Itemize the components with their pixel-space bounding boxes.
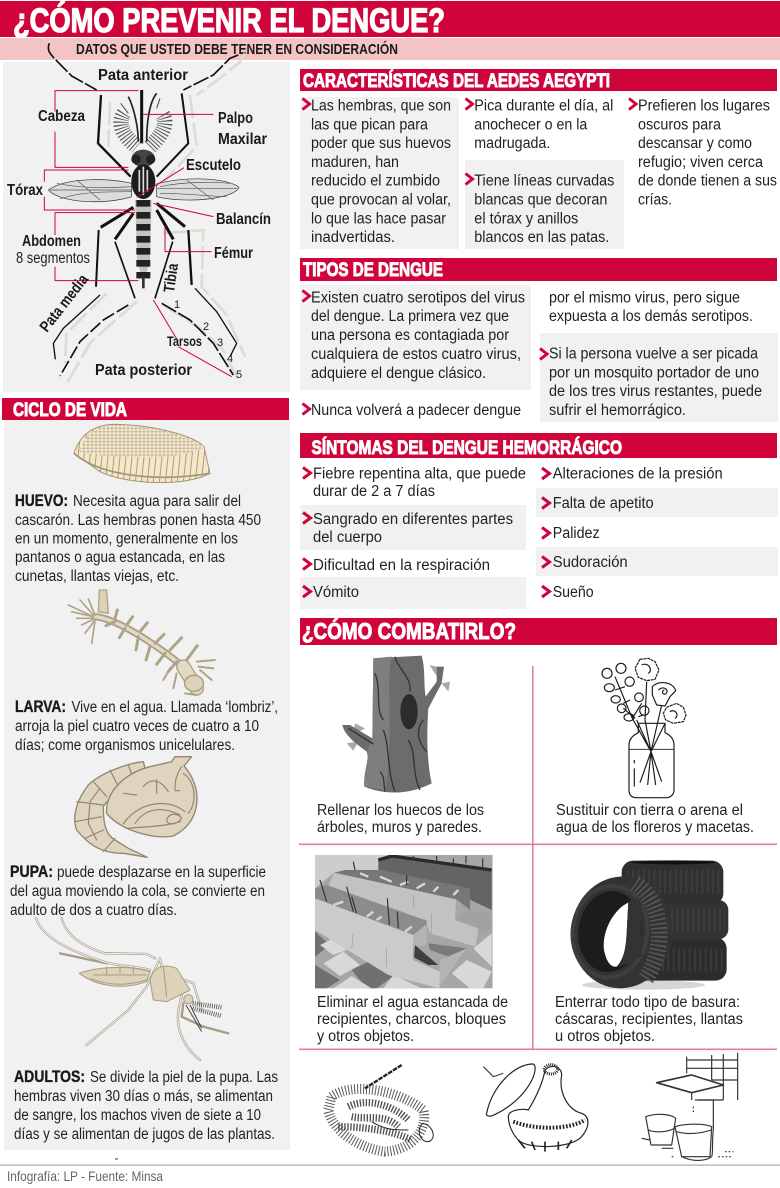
panel: mosquito anatomy bbox=[3, 43, 290, 392]
title banner bbox=[0, 1, 780, 40]
sketch: covered container bbox=[483, 1064, 588, 1152]
bullet: serotipos: una persona es contagiada por bbox=[311, 327, 509, 344]
text: pupa bbox=[10, 863, 266, 919]
bullet: hemorrágico bbox=[540, 333, 778, 422]
bullet: hemorrágico: de los tres virus restantes, puede bbox=[549, 383, 762, 400]
text: huevo: en un momento, generalmente en los bbox=[15, 530, 238, 548]
symptoms left column: durar de 2 a 7 días bbox=[313, 483, 435, 500]
wings bbox=[48, 179, 239, 202]
bullet: hembras: poder que sus huevos bbox=[311, 135, 451, 152]
heading: características: CARACTERÍSTICAS DEL AEDES AEGYPTI bbox=[303, 69, 610, 92]
bullet: nunca volverá: por el mismo virus, pero sigue bbox=[549, 289, 740, 306]
caption: eliminar: y otros objetos. bbox=[317, 1028, 414, 1045]
footer: Infografía: LP - Fuente: Minsa bbox=[7, 1168, 163, 1184]
bullet: lugares: crías. bbox=[638, 192, 672, 208]
text: adultos bbox=[14, 1068, 278, 1143]
text: adultos: días y se alimentan de jugos de las plantas. bbox=[14, 1126, 275, 1143]
text: larva: Vive en el agua. Llamada ‘lombriz’, bbox=[72, 699, 278, 716]
anatomy labels: Maxilar bbox=[218, 131, 267, 148]
bullet: serotipos: Existen cuatro serotipos del virus bbox=[311, 289, 525, 306]
text: huevo bbox=[15, 492, 261, 585]
bullet: nunca volverá: Nunca volverá a padecer dengue bbox=[311, 402, 521, 419]
anatomy labels: Pata posterior bbox=[95, 362, 192, 379]
bullet: líneas bbox=[465, 160, 624, 249]
proboscis and head bbox=[131, 90, 155, 167]
anatomy labels: 3 bbox=[217, 337, 223, 349]
bullet: pica bbox=[466, 98, 613, 152]
illustration: pupa bbox=[75, 757, 197, 857]
bullet: hemorrágico: por un mosquito portador de uno bbox=[549, 364, 759, 382]
caption: rellenar: árboles, muros y paredes. bbox=[317, 819, 482, 836]
bullet: lugares: refugio; viven cerca bbox=[638, 154, 763, 171]
text: larva: LARVA: bbox=[15, 698, 66, 716]
anatomy labels: Fémur bbox=[214, 245, 253, 262]
symptoms left column: Dificultad en la respiración bbox=[313, 557, 490, 574]
caption: rellenar bbox=[317, 802, 484, 836]
illustration: egg bbox=[74, 424, 210, 483]
symptoms left column: Vómito bbox=[313, 584, 359, 601]
subtitle band: DATOS QUE USTED DEBE TENER EN CONSIDERACIÓN bbox=[76, 40, 398, 58]
mosquito diagram bbox=[44, 43, 245, 383]
caption: sustituir bbox=[556, 802, 754, 836]
bullet: pica: madrugada. bbox=[474, 135, 550, 152]
caption: eliminar: recipientes, charcos, bloques bbox=[317, 1011, 506, 1028]
caption: sustituir: agua de los floreros y macetas. bbox=[556, 819, 754, 836]
text: pupa: PUPA: bbox=[10, 863, 53, 881]
thorax bbox=[131, 164, 155, 199]
symptoms right column: Falta de apetito bbox=[553, 495, 654, 512]
anatomy labels: 2 bbox=[203, 321, 209, 333]
bullet: serotipos: del dengue. La primera vez que bbox=[311, 308, 509, 325]
text: pupa: adulto de dos a cuatro días. bbox=[10, 902, 177, 919]
text: pupa: puede desplazarse en la superficie bbox=[57, 864, 266, 881]
red callout lines bbox=[44, 91, 232, 377]
panel: síntomas bbox=[300, 433, 778, 609]
symptoms left column: Sangrado en diferentes partes bbox=[313, 511, 513, 528]
bullet: serotipos bbox=[300, 285, 531, 390]
caption: rellenar: Rellenar los huecos de los bbox=[317, 802, 484, 819]
bullet: serotipos: cualquiera de estos cuatro virus, bbox=[311, 346, 521, 363]
anatomy labels: 5 bbox=[236, 369, 242, 381]
antennae bbox=[121, 93, 165, 147]
symptoms right column: Palidez bbox=[553, 525, 600, 542]
bullet: hembras: reducido el zumbido bbox=[311, 173, 440, 190]
bullet: lugares bbox=[629, 98, 777, 208]
text: adultos: ADULTOS: bbox=[14, 1068, 85, 1086]
bullet: líneas: blancas que decoran bbox=[474, 192, 607, 208]
illustration: flower vase bbox=[602, 658, 686, 798]
panel: ciclo de vida bbox=[2, 398, 290, 1150]
bullet: hemorrágico: sufrir el hemorrágico. bbox=[549, 402, 686, 419]
bullet: lugares: descansar y como bbox=[638, 135, 752, 152]
sketch: garbage pile bbox=[328, 1065, 433, 1152]
symptoms right column: Alteraciones de la presión bbox=[553, 466, 723, 483]
anatomy labels: Tórax bbox=[7, 182, 43, 199]
bullet: líneas: Tiene líneas curvadas bbox=[474, 173, 615, 190]
heading: cómo combatirlo: ¿CÓMO COMBATIRLO? bbox=[302, 617, 516, 644]
anatomy labels: Pata anterior bbox=[98, 67, 188, 84]
photo: concrete blocks bbox=[315, 855, 493, 988]
illustration: adult mosquito bbox=[36, 918, 228, 1060]
anatomy labels: 1 bbox=[174, 299, 180, 311]
bullet: hembras bbox=[300, 97, 459, 249]
symptoms right column: Sueño bbox=[553, 584, 594, 601]
text: adultos: hembras viven 30 días o más, se alimentan bbox=[14, 1088, 273, 1105]
anatomy labels: Cabeza bbox=[38, 108, 85, 125]
text: pupa: del agua moviendo la cola, se convierte en bbox=[10, 883, 265, 900]
panel: características bbox=[300, 69, 777, 249]
anatomy labels: Pata media bbox=[37, 271, 92, 335]
caption: enterrar: cáscaras, recipientes, llantas bbox=[555, 1011, 743, 1028]
bullet: hembras: lo que las hace pasar bbox=[311, 210, 446, 227]
bullet: pica: anochecer o en la bbox=[474, 116, 588, 134]
bullet: líneas: blancos en las patas. bbox=[474, 229, 609, 246]
bullet: lugares: Prefieren los lugares bbox=[638, 98, 770, 115]
anatomy labels: 4 bbox=[227, 353, 233, 365]
anatomy labels: Balancín bbox=[216, 211, 271, 228]
anatomy labels: 8 segmentos bbox=[16, 250, 90, 267]
text: huevo: cunetas, llantas viejas, etc. bbox=[15, 568, 179, 585]
symptoms left column: del cuerpo bbox=[313, 529, 382, 546]
text: huevo: pantanos o agua estancada, en las bbox=[15, 549, 225, 566]
panel: tipos de dengue bbox=[300, 258, 778, 422]
bullet: hemorrágico: Si la persona vuelve a ser picada bbox=[549, 346, 758, 362]
symptoms left column bbox=[300, 466, 526, 609]
heading: tipos de dengue: TIPOS DE DENGUE bbox=[303, 259, 443, 281]
bullet: nunca volverá bbox=[302, 289, 753, 419]
caption: sustituir: Sustituir con tierra o arena el bbox=[556, 802, 743, 819]
bullet: serotipos: adquiere el dengue clásico. bbox=[311, 365, 486, 382]
bullet: pica: Pica durante el día, al bbox=[474, 98, 613, 115]
symptoms right column: Sudoración bbox=[553, 554, 628, 571]
anatomy labels: Abdomen bbox=[22, 233, 81, 250]
heading: síntomas bbox=[300, 433, 777, 459]
anatomy labels: Tarsos bbox=[167, 334, 202, 349]
text: huevo: cascarón. Las hembras ponen hasta 450 bbox=[15, 512, 261, 529]
caption: eliminar bbox=[317, 994, 508, 1045]
text: adultos: de sangre, los machos viven de siete a 10 bbox=[14, 1107, 261, 1124]
text: huevo: HUEVO: bbox=[15, 492, 68, 510]
illustration: tree trunk bbox=[342, 656, 450, 793]
sketch: sink and buckets bbox=[642, 1053, 738, 1160]
illustration: larva bbox=[68, 590, 215, 695]
bullet: hembras: maduren, han bbox=[311, 154, 399, 171]
bullet: hembras: Las hembras, que son bbox=[311, 98, 451, 115]
photo: stacked tires bbox=[564, 860, 728, 995]
bullet: hembras: que provocan al volar, bbox=[311, 192, 451, 208]
abdomen bbox=[135, 200, 152, 288]
bullet: hembras: las que pican para bbox=[311, 116, 428, 134]
heading: ciclo de vida: CICLO DE VIDA bbox=[13, 399, 127, 421]
caption: eliminar: Eliminar el agua estancada de bbox=[317, 994, 508, 1011]
panel: cómo combatirlo bbox=[299, 617, 777, 1160]
heading: ciclo de vida bbox=[2, 398, 289, 421]
bullet: lugares: oscuros para bbox=[638, 116, 721, 134]
caption: enterrar bbox=[555, 994, 743, 1045]
text: larva: días; come organismos unicelulares. bbox=[15, 737, 235, 754]
heading: tipos de dengue bbox=[300, 258, 777, 281]
symptoms right column bbox=[536, 466, 778, 601]
heading: síntomas: SÍNTOMAS DEL DENGUE HEMORRÁGICO bbox=[312, 436, 622, 459]
text: adultos: Se divide la piel de la pupa. Las bbox=[90, 1069, 278, 1086]
bullet: hembras: inadvertidas. bbox=[311, 229, 395, 246]
caption: enterrar: Enterrar todo tipo de basura: bbox=[555, 994, 740, 1011]
text: huevo: Necesita agua para salir del bbox=[73, 493, 241, 510]
anatomy labels: Escutelo bbox=[186, 157, 241, 174]
grid lines bbox=[299, 666, 777, 1050]
caption: enterrar: u otros objetos. bbox=[555, 1028, 655, 1045]
anatomy labels: Tibia bbox=[161, 262, 182, 294]
symptoms left column: Fiebre repentina alta, que puede bbox=[313, 466, 526, 483]
bullet: líneas: el tórax y anillos bbox=[474, 210, 579, 227]
heading: cómo combatirlo bbox=[300, 617, 777, 645]
title banner: ¿CÓMO PREVENIR EL DENGUE? bbox=[13, 2, 445, 40]
anatomy labels: Palpo bbox=[218, 110, 253, 127]
text: larva bbox=[15, 698, 278, 754]
subtitle band bbox=[0, 38, 780, 60]
text: larva: arroja la piel cuatro veces de cuatro a 10 bbox=[15, 718, 259, 735]
anatomy labels bbox=[7, 67, 271, 381]
bullet: nunca volverá: expuesta a los demás serotipos. bbox=[549, 308, 753, 325]
